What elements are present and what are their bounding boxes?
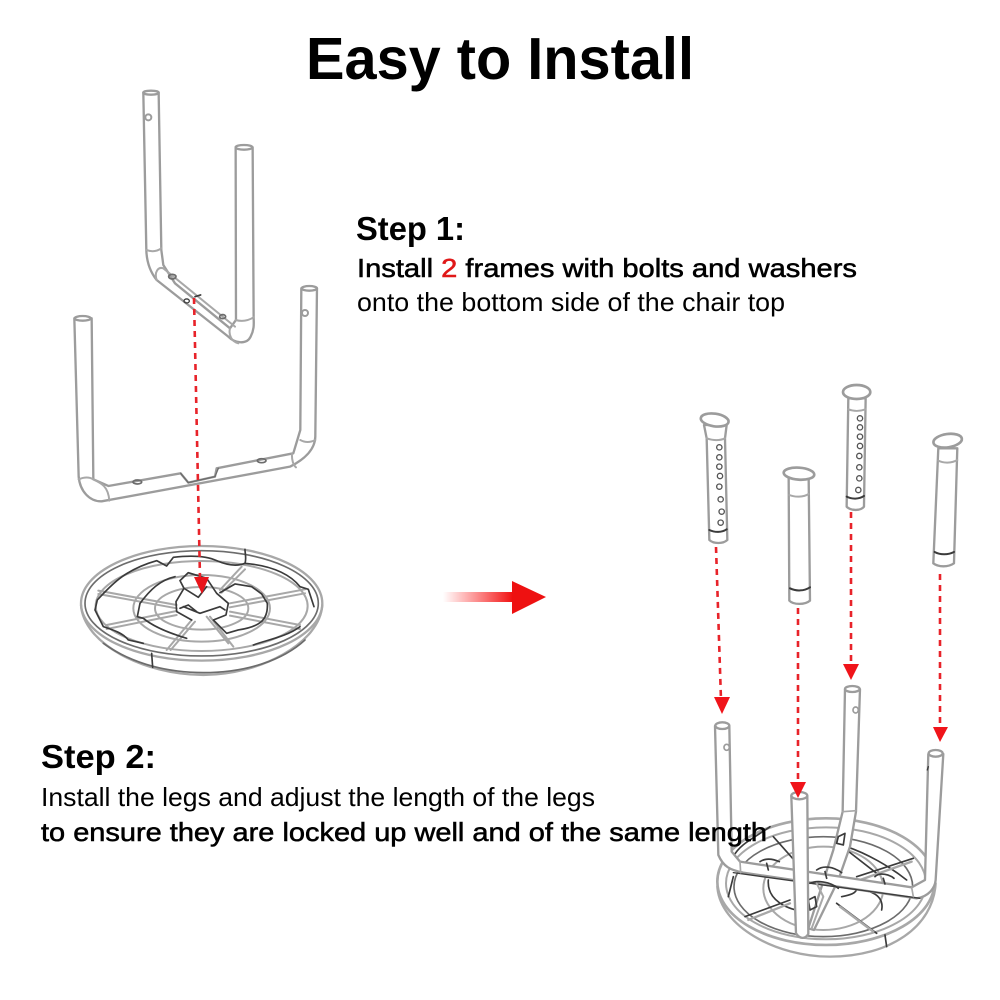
arrow: leg 3 down (843, 512, 859, 680)
arrow: go to next step (443, 581, 546, 614)
icon: upper U-shaped frame (143, 91, 254, 343)
step 1 line 1: Install 2 frames with bolts and washers (357, 253, 857, 283)
step 1 heading: Step 1: (356, 210, 465, 247)
icon: chair top tray underside (81, 546, 322, 675)
arrow: leg 4 down (933, 574, 948, 742)
front tube (791, 792, 808, 938)
back tube and bar (808, 686, 860, 930)
arrow: frame to tray (194, 298, 209, 594)
step 2 line 1: Install the legs and adjust the length of the legs (41, 782, 595, 812)
step 2 line 2: to ensure they are locked up well and of the same length (41, 817, 767, 847)
icon: lower U-shaped frame (74, 286, 317, 501)
arrow: leg 1 down (714, 547, 730, 714)
bolts (760, 833, 894, 928)
icon: assembled base with frames (715, 686, 943, 957)
leg 3 with holes (843, 385, 870, 510)
title: Easy to Install (306, 26, 694, 92)
step 1 line 2: onto the bottom side of the chair top (357, 287, 785, 317)
arrow: leg 2 down (790, 608, 806, 798)
icon: hole on lower frame tube (302, 310, 308, 316)
step 2 heading: Step 2: (41, 738, 156, 775)
tray (717, 818, 936, 957)
leg 4 plain (933, 432, 963, 566)
leg 1 with holes (700, 412, 729, 543)
text block: step 2 (41, 738, 767, 847)
leg 2 plain (783, 467, 815, 604)
rear leg 1 and 4 crossbar (715, 722, 943, 898)
icon: four adjustable legs (700, 385, 963, 604)
text block: step 1 (356, 210, 857, 317)
